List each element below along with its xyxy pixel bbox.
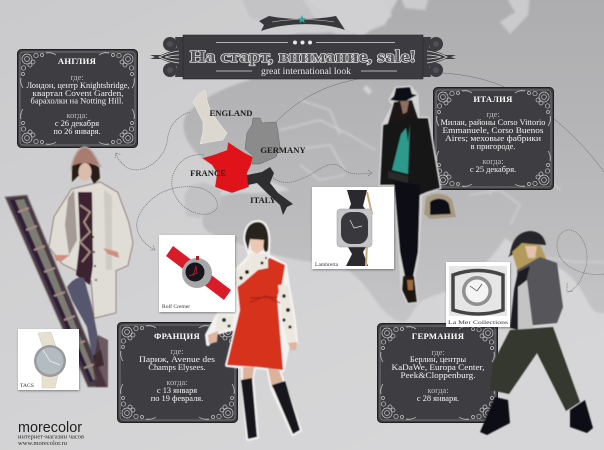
leg bbox=[67, 277, 101, 360]
hat bbox=[390, 87, 417, 102]
logo: morecolor: www.morecolor.ru bbox=[18, 441, 67, 447]
when: с 13 января bbox=[157, 386, 197, 395]
where: Peek&Cloppenburg. bbox=[400, 371, 476, 380]
dashed route: France bbox=[137, 155, 217, 250]
scarf bbox=[236, 253, 268, 288]
when: когда: bbox=[66, 111, 88, 120]
watch bbox=[449, 266, 507, 316]
where: Париж, Avenue des bbox=[139, 355, 215, 364]
heading: ГЕРМАНИЯ bbox=[412, 331, 465, 341]
trousers bbox=[394, 182, 420, 277]
hair bbox=[245, 222, 269, 252]
where bbox=[440, 110, 546, 151]
left boot bbox=[480, 397, 510, 435]
coat bbox=[50, 183, 132, 317]
dress bbox=[76, 192, 93, 285]
where: барахолки на Notting Hill. bbox=[30, 96, 123, 106]
ribbon with star bbox=[259, 15, 345, 31]
where: KaDaWe, Europa Center, bbox=[392, 363, 484, 372]
where: где: bbox=[486, 110, 500, 119]
dress bbox=[227, 258, 285, 370]
legs bbox=[243, 367, 285, 388]
hair bbox=[386, 100, 418, 130]
when bbox=[151, 378, 203, 403]
caption: Rolf Cremer bbox=[162, 303, 190, 310]
caption: La Mer Collections bbox=[448, 320, 508, 326]
title banner bbox=[150, 15, 456, 79]
country: England: ENGLAND bbox=[210, 108, 252, 118]
map of countries bbox=[190, 90, 306, 215]
when: по 19 февраля. bbox=[151, 394, 203, 403]
when: когда: bbox=[482, 157, 504, 166]
face bbox=[525, 246, 537, 258]
where: в пригороде. bbox=[471, 142, 515, 151]
boot bbox=[93, 350, 104, 368]
when: когда: bbox=[427, 386, 449, 395]
dashed route: Germany loop bbox=[557, 230, 604, 292]
panel: France bbox=[118, 322, 238, 422]
country: Germany: GERMANY bbox=[260, 145, 306, 155]
watch card: La Mer Collections bbox=[446, 262, 510, 327]
where bbox=[26, 73, 130, 106]
right boot bbox=[570, 400, 593, 433]
panel: Italy bbox=[434, 88, 554, 190]
where: где: bbox=[70, 73, 84, 82]
face bbox=[250, 239, 264, 254]
heading: ФРАНЦИЯ bbox=[154, 331, 201, 341]
where: Берлин, центры bbox=[410, 355, 466, 364]
top bbox=[518, 280, 533, 330]
when: с 25 декабря. bbox=[470, 165, 516, 174]
watch card: Rolf Cremer bbox=[159, 235, 235, 312]
caption: TACS bbox=[20, 383, 34, 389]
when: когда: bbox=[166, 378, 188, 387]
dashed route: England bbox=[115, 112, 190, 170]
watch card: Lambretta bbox=[312, 187, 394, 269]
where: Милан, районы Corso Vittorio bbox=[440, 118, 546, 127]
coat outline bbox=[50, 183, 132, 317]
face bbox=[78, 163, 92, 181]
when bbox=[417, 386, 459, 403]
ornament right bbox=[423, 37, 456, 77]
country: Italy: ITALY bbox=[250, 195, 277, 205]
heading: АНГЛИЯ bbox=[58, 56, 97, 66]
where: Champs Elysees. bbox=[148, 363, 206, 372]
dots bbox=[293, 40, 312, 44]
hair bbox=[512, 243, 546, 282]
face bbox=[400, 101, 409, 114]
cut-out outline bbox=[380, 87, 440, 303]
figure: woman on ladder bbox=[5, 147, 132, 387]
where: где: bbox=[431, 348, 445, 357]
ornament left bbox=[150, 37, 183, 77]
caption: Lambretta bbox=[315, 262, 339, 268]
shoes bbox=[402, 276, 417, 303]
hat bbox=[508, 231, 546, 257]
jacket bbox=[513, 257, 563, 327]
trousers bbox=[490, 327, 580, 411]
where: Emmanuele, Corso Buenos bbox=[442, 126, 544, 135]
hair bbox=[72, 163, 100, 184]
when: по 26 января. bbox=[53, 127, 101, 136]
white cut-out outline bbox=[207, 222, 300, 439]
figure: woman in grey bbox=[480, 231, 593, 435]
watch bbox=[166, 246, 231, 300]
logo: morecolor: интернет-магазин часов bbox=[18, 434, 84, 440]
where bbox=[139, 347, 215, 372]
dashed route: Italy bbox=[273, 164, 372, 182]
figure: woman in red dress bbox=[207, 222, 300, 439]
where: квартал Covent Garden, bbox=[32, 89, 124, 98]
logo: morecolor bbox=[18, 419, 84, 447]
when: с 28 января. bbox=[417, 394, 459, 403]
watch bbox=[34, 332, 66, 388]
where: Aires; меховые фабрики bbox=[445, 134, 542, 143]
where: где: bbox=[170, 347, 184, 356]
shirt bbox=[392, 124, 410, 174]
bag bbox=[424, 194, 456, 219]
heading: ИТАЛИЯ bbox=[473, 94, 513, 104]
watch card: TACS bbox=[18, 329, 79, 390]
country: France: FRANCE bbox=[190, 168, 226, 178]
coat buttons bbox=[92, 236, 97, 281]
hands bbox=[54, 248, 119, 261]
panel: England bbox=[18, 50, 138, 148]
where bbox=[392, 348, 484, 380]
figure: woman in black bbox=[380, 87, 456, 303]
belt bbox=[388, 171, 408, 183]
hat bbox=[71, 147, 101, 170]
where: Лондон, центр Knightsbridge, bbox=[26, 81, 130, 90]
jacket bbox=[380, 118, 440, 195]
dashed route: Germany to top bbox=[276, 72, 604, 172]
logo: morecolor: morecolor bbox=[18, 419, 82, 436]
ladder bbox=[5, 195, 107, 387]
panel: Germany bbox=[378, 324, 498, 422]
title text: На старт, внимание, sale! bbox=[190, 47, 416, 66]
watch bbox=[337, 190, 372, 266]
when: с 26 декабря bbox=[55, 119, 99, 128]
boots bbox=[241, 378, 300, 439]
hands bbox=[208, 331, 297, 350]
sleeves bbox=[215, 285, 296, 344]
subtitle: great international look bbox=[261, 66, 351, 76]
when bbox=[470, 157, 516, 174]
when bbox=[53, 111, 101, 136]
banner panel bbox=[183, 35, 423, 79]
